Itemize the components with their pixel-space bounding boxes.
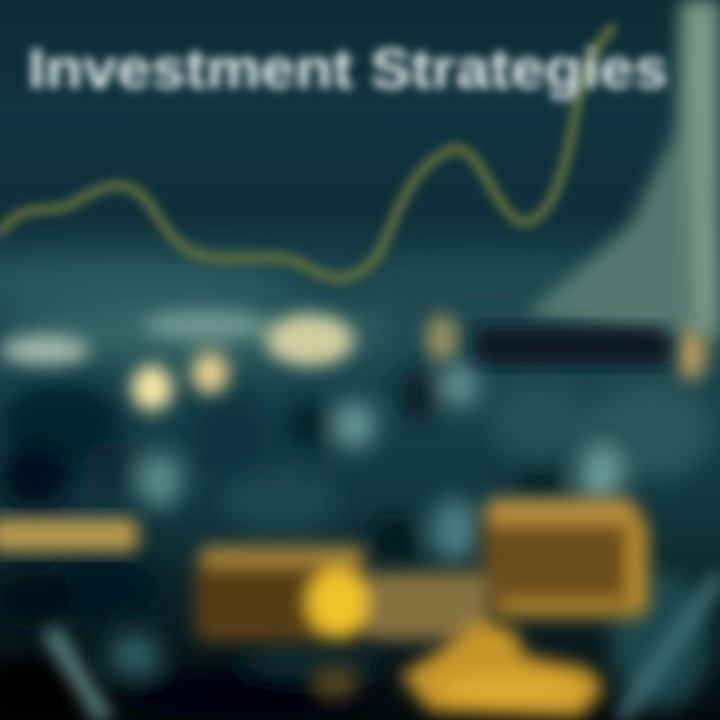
glowing city lights [0, 310, 707, 411]
city skyline texture [0, 363, 715, 720]
diagonal light streaks [50, 575, 720, 720]
central gold block [195, 546, 490, 642]
title: Investment Strategies [28, 37, 668, 101]
horizon haze band [0, 259, 610, 357]
dark banner [475, 328, 670, 364]
mountain shape right [525, 0, 720, 345]
right gold block [482, 498, 648, 618]
left gold bar [0, 518, 138, 552]
line chart [0, 28, 612, 278]
front gold bar [400, 620, 605, 718]
small coin bottom [310, 665, 360, 701]
